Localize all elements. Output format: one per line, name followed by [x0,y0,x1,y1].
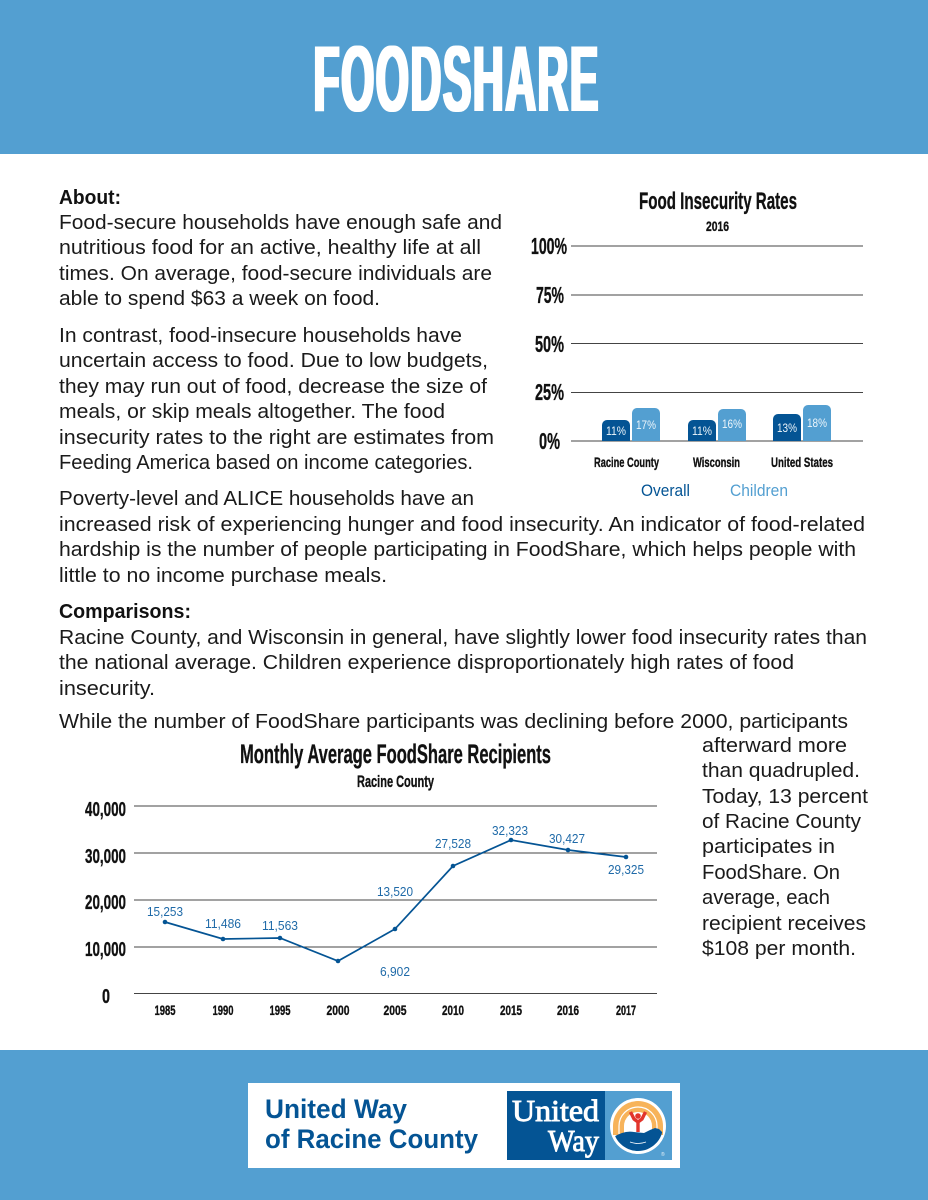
bar value labels: 16% [722,417,742,431]
data labels: 11,486 [205,916,241,931]
icon: united way logo: ® [661,1151,665,1158]
logo wordmark: United Way [265,1094,407,1124]
text block: right column: Today, 13 percent [702,785,868,808]
data labels: 13,520 [377,884,413,899]
title: FOODSHARE [314,27,600,132]
category labels: Wisconsin [693,454,740,470]
y axis labels: 0% [539,428,560,454]
text block: right column [702,734,868,960]
bar value labels: 18% [807,416,827,430]
text block: comparisons: the national average. Children experience disproportionately high rates of food [59,651,794,674]
y axis labels: 75% [536,282,564,308]
x axis labels: 2010 [442,1002,464,1018]
text block: about: uncertain access to food. Due to low budgets, [59,349,488,372]
x axis labels: 2017 [616,1002,636,1018]
text block: comparisons [59,600,867,733]
y axis labels [531,233,567,454]
x axis labels [154,1002,636,1018]
text block: about: About: [59,186,121,209]
text block: about: able to spend $63 a week on food. [59,287,380,310]
chart title: Food Insecurity Rates [639,188,797,215]
text block: about: Food-secure households have enough safe and [59,211,502,234]
text block: about [59,186,865,587]
y axis labels: 30,000 [85,846,126,868]
icon: united way logo: Way [548,1123,599,1158]
x axis labels: 1990 [212,1002,234,1018]
category labels: United States [771,454,833,470]
text block: right column: afterward more [702,734,847,757]
text block: right column: participates in [702,835,835,858]
bar value labels: 11% [606,424,626,438]
text block: about: hardship is the number of people participating in FoodShare, which helps people with [59,538,856,561]
text block: right column: than quadrupled. [702,759,860,782]
x axis labels: 1995 [270,1002,291,1018]
text block: about: In contrast, food-insecure households have [59,324,462,347]
chart subtitle: Racine County [357,772,434,791]
text block: about: increased risk of experiencing hunger and food insecurity. An indicator of food-related [59,513,865,536]
logo wordmark [265,1094,478,1154]
data labels: 30,427 [549,831,585,846]
bar value labels: 17% [636,418,656,432]
x axis labels: 1985 [154,1002,176,1018]
data labels: 32,323 [492,823,528,838]
icon: united way logo [507,1091,672,1160]
y axis labels: 20,000 [85,892,126,914]
logo wordmark: of Racine County [265,1124,478,1154]
y axis labels: 10,000 [85,939,126,961]
data labels [147,823,644,979]
data labels: 6,902 [380,964,410,979]
data labels: 29,325 [608,862,644,877]
chart title: Monthly Average FoodShare Recipients [240,739,551,769]
text block: right column: $108 per month. [702,937,856,960]
text block: about: Feeding America based on income categories. [59,451,473,474]
x axis labels: 2015 [500,1002,522,1018]
text block: comparisons: While the number of FoodShare participants was declining before 2000, participants [59,710,848,733]
text block: about: nutritious food for an active, healthy life at all [59,236,481,259]
text block: about: little to no income purchase meals. [59,564,387,587]
text block: comparisons: insecurity. [59,677,155,700]
text block: comparisons: Racine County, and Wisconsin in general, have slightly lower food insecurity rates than [59,626,867,649]
data labels: 27,528 [435,836,471,851]
text block: comparisons: Comparisons: [59,600,191,623]
data labels: 11,563 [262,918,298,933]
text block: right column: average, each [702,886,830,909]
y axis labels: 0 [102,986,110,1008]
y axis labels: 25% [535,379,564,405]
bar value labels [606,416,827,438]
category labels: Racine County [594,454,659,470]
bar value labels: 11% [692,424,712,438]
x axis labels: 2000 [326,1002,350,1018]
footer banner [0,1050,928,1200]
x axis labels: 2005 [384,1002,407,1018]
bars [602,405,831,441]
legend [641,481,788,500]
header banner [0,0,928,154]
chart subtitle: 2016 [706,218,729,234]
x axis labels: 2016 [557,1002,579,1018]
data labels: 15,253 [147,904,183,919]
text block: right column: of Racine County [702,810,862,833]
chart: monthly average foodshare recipients [85,739,657,1018]
text block: about: they may run out of food, decrease the size of [59,375,487,398]
icon: united way logo: United [512,1093,600,1128]
text block: right column: FoodShare. On [702,861,840,884]
y axis labels: 50% [535,331,564,357]
logo panel [248,1083,680,1168]
category labels [594,454,833,470]
text block: about: Poverty-level and ALICE households have an [59,487,474,510]
text block: about: times. On average, food-secure individuals are [59,262,492,285]
text block: about: insecurity rates to the right are estimates from [59,426,494,449]
text block: right column: recipient receives [702,912,866,935]
legend: Overall [641,481,690,500]
y axis labels: 100% [531,233,567,259]
text block: about: meals, or skip meals altogether. The food [59,400,445,423]
y axis labels: 40,000 [85,799,126,821]
data line [163,838,628,963]
bar value labels: 13% [777,421,797,435]
chart: food insecurity rates [531,188,863,500]
legend: Children [730,481,788,500]
y axis labels [85,799,126,1008]
